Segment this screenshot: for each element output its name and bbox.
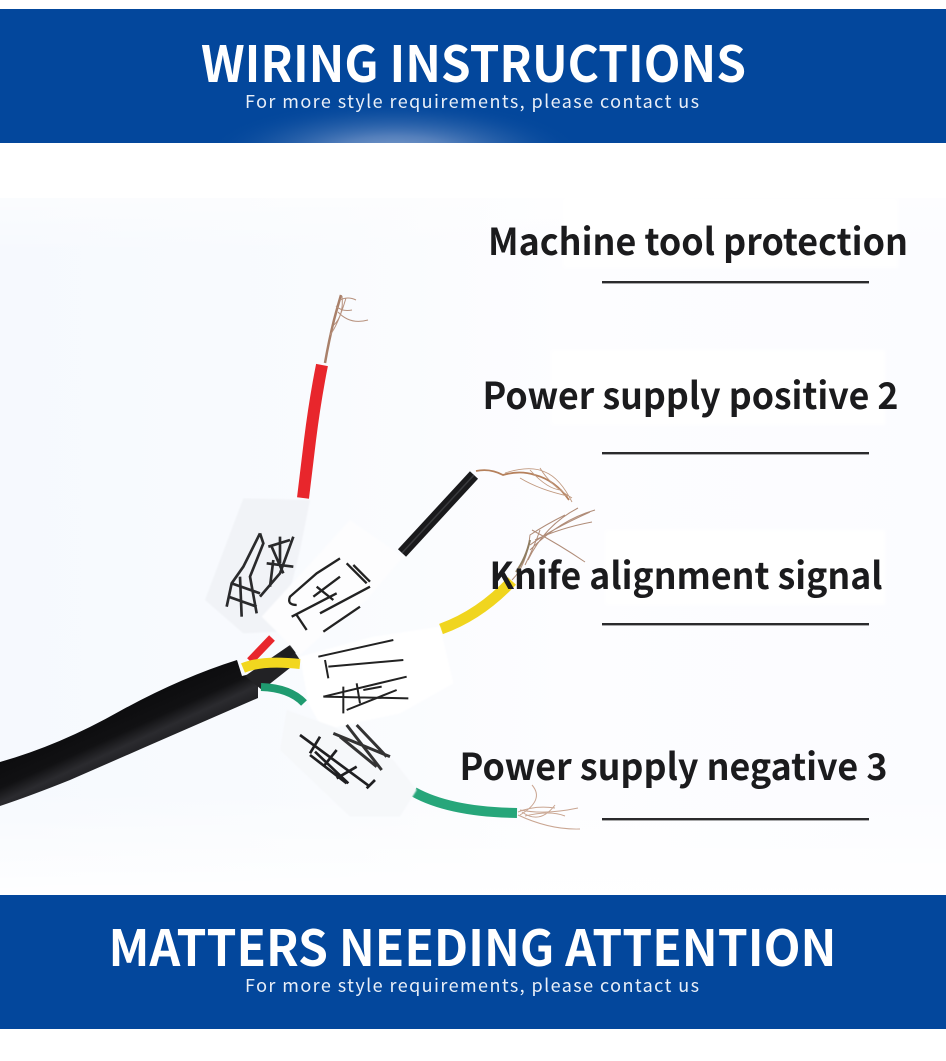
red wire xyxy=(303,295,368,498)
footer subtitle: For more style requirements, please contact us xyxy=(245,972,699,998)
label on yellow wire xyxy=(300,627,453,730)
header title: WIRING INSTRUCTIONS xyxy=(201,25,746,97)
label on green wire xyxy=(280,710,417,817)
footer banner xyxy=(0,895,946,1029)
label on red wire xyxy=(205,498,310,633)
header subtitle: For more style requirements, please contact us xyxy=(245,88,699,114)
black cable xyxy=(0,638,304,806)
label: knife alignment signal: Knife alignment signal xyxy=(490,546,882,600)
label on black wire xyxy=(262,520,403,655)
photo background xyxy=(0,198,946,895)
black wire xyxy=(402,468,572,553)
label: machine tool protection: Machine tool protection xyxy=(488,212,908,266)
wiring harness photo illustration xyxy=(0,295,595,829)
label: power supply positive 2: Power supply positive 2 xyxy=(482,366,898,420)
yellow wire xyxy=(441,508,595,629)
header banner xyxy=(0,9,946,143)
label: power supply negative 3: Power supply negative 3 xyxy=(460,737,888,791)
footer title: MATTERS NEEDING ATTENTION xyxy=(108,909,836,981)
green wire xyxy=(414,785,580,829)
